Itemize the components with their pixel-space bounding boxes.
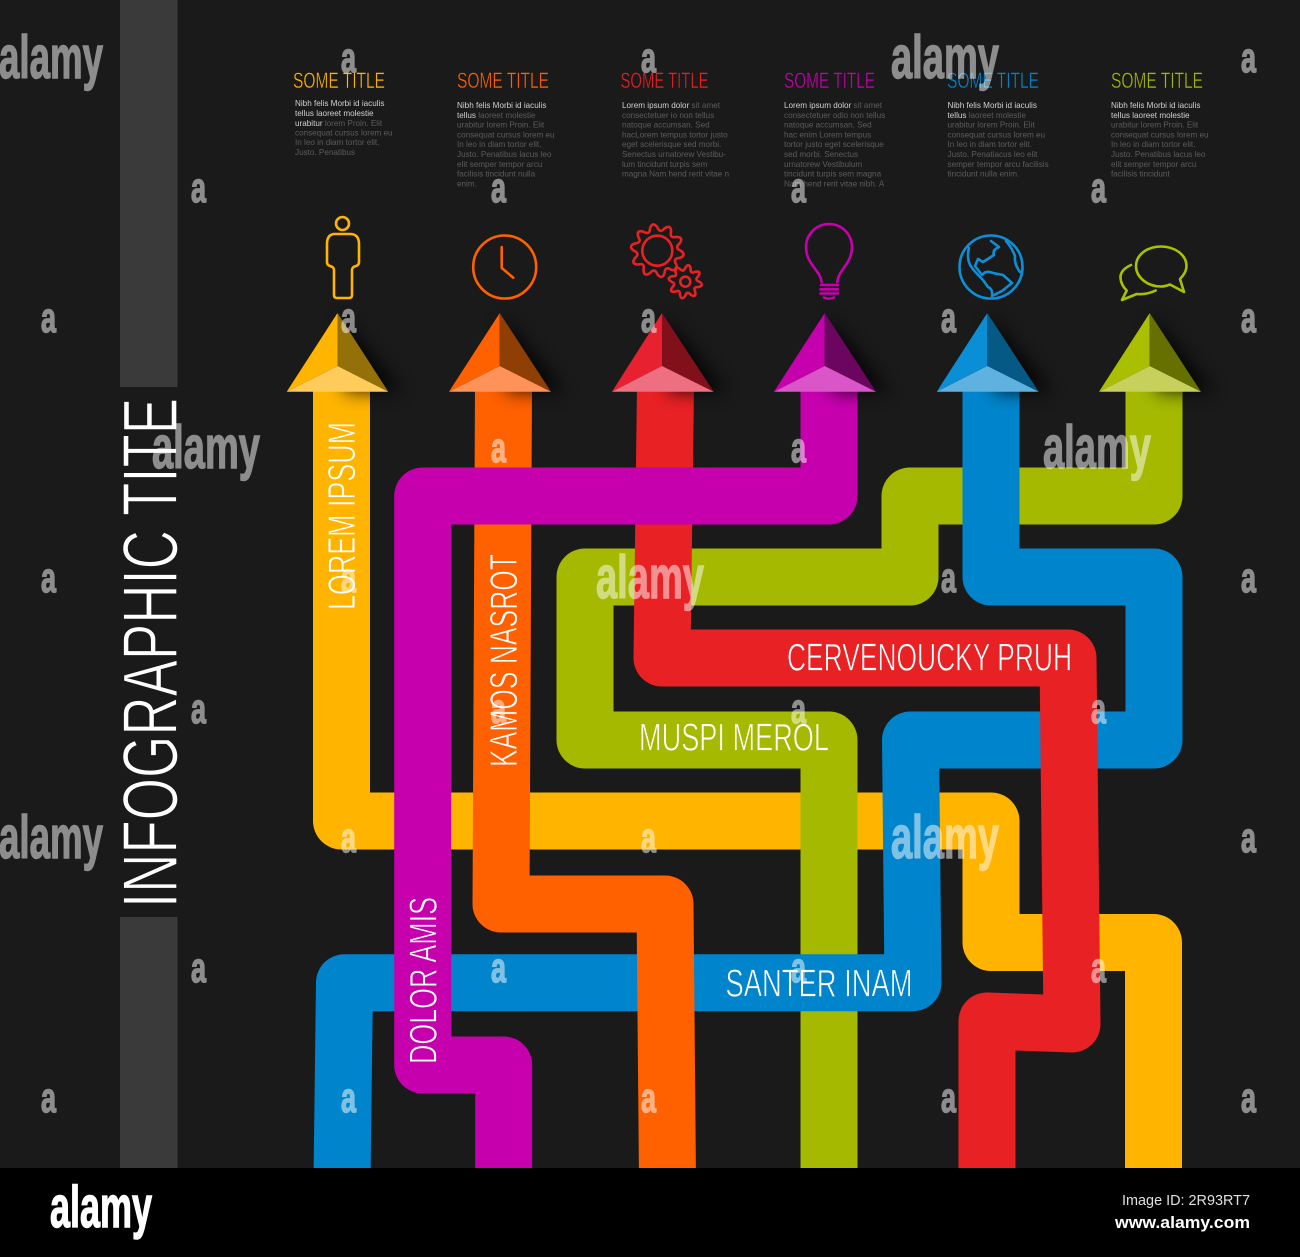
column 1 text: consequat cursus lorem eu <box>295 128 393 138</box>
watermark overlay: a <box>791 944 806 991</box>
footer image id: Image ID: 2R93RT7 <box>1122 1192 1250 1209</box>
arrow: orange <box>449 313 564 392</box>
column 5 text <box>947 68 1049 178</box>
column 1 text: tellus laoreet molestie <box>295 109 374 118</box>
column 2 text: enim. <box>457 180 477 188</box>
column 1 text: Justo. Penatibus <box>295 148 355 157</box>
watermark overlay: a <box>1241 814 1256 861</box>
column 1 text: urabitur lorem Proin. Elit <box>295 119 383 128</box>
column 1 text <box>293 68 393 157</box>
column 2 text: Justo. Penatibus lacus leo <box>457 150 552 159</box>
watermark overlay: a <box>941 1074 956 1121</box>
main title: INFOGRAPHIC TITE <box>106 398 194 908</box>
column 3 text: eget scelerisque sed morbi. <box>622 140 721 149</box>
watermark overlay: a <box>641 34 656 81</box>
watermark overlay: a <box>1091 944 1106 991</box>
watermark overlay: a <box>1241 294 1256 341</box>
column 4 text: consectetuer odio non tellus <box>784 111 885 120</box>
icon: person <box>327 217 359 298</box>
watermark overlay: a <box>491 164 506 211</box>
column 3 text: Lorem ipsum dolor sit amet <box>622 101 721 110</box>
column 2 text: consequat cursus lorem eu <box>457 130 555 140</box>
watermark overlay: alamy <box>1043 414 1151 481</box>
icon: speech bubbles <box>1120 246 1186 300</box>
ribbons <box>342 385 1154 1180</box>
ribbon: green <box>585 385 1154 1180</box>
watermark overlay: a <box>641 814 656 861</box>
watermark overlay: a <box>341 1074 356 1121</box>
column 5 text: Justo. Penatiacus leo elit <box>948 150 1038 159</box>
column 2 text: tellus laoreet molestie <box>457 111 536 120</box>
watermark overlay: a <box>191 164 206 211</box>
column 1 text: Nibh felis Morbi id iaculis <box>295 99 384 108</box>
watermark overlay: a <box>791 424 806 471</box>
column 5 text: tellus laoreet molestie <box>948 111 1027 120</box>
ribbon: blue <box>342 385 1154 1180</box>
watermark overlay: a <box>491 944 506 991</box>
watermark overlay: a <box>491 685 506 732</box>
label: muspi merol: MUSPI MEROL <box>639 716 829 760</box>
ribbon: magenta <box>423 385 829 1180</box>
label: santer inam: SANTER INAM <box>726 962 912 1006</box>
column 2 text: SOME TITLE <box>457 68 549 93</box>
icon: gears <box>631 224 702 298</box>
label: dolor amis: DOLOR AMIS <box>402 897 446 1064</box>
column 5 text: Nibh felis Morbi id iaculis <box>948 101 1037 110</box>
arrow: green <box>1099 313 1214 392</box>
label: kamos nasrot: KAMOS NASROT <box>483 554 526 767</box>
footer url: www.alamy.com <box>1114 1213 1250 1232</box>
column 6 text: tellus laoreet molestie <box>1111 111 1190 120</box>
column headings and text <box>293 68 1209 188</box>
arrow: blue <box>937 313 1052 392</box>
watermark overlay: a <box>1241 554 1256 601</box>
column 6 text: facilisis tincidunt <box>1111 170 1170 178</box>
ribbon: orange <box>501 385 668 1180</box>
column 6 text: urabitur lorem Proin. Elit <box>1111 120 1199 130</box>
column 5 text: SOME TITLE <box>947 68 1039 93</box>
arrow heads <box>287 313 1214 392</box>
watermark overlay: a <box>341 554 356 601</box>
watermark overlay: a <box>41 1074 56 1121</box>
column 5 text: semper tempor arcu facilisis <box>948 160 1049 169</box>
column 4 text: tortor justo eget scelerisque <box>784 140 884 149</box>
column 6 text <box>1111 68 1209 178</box>
column 2 text <box>457 68 555 188</box>
label: cervenoucky pruh: CERVENOUCKY PRUH <box>787 636 1072 680</box>
sidebar band <box>120 0 178 1168</box>
column 3 text: natoque accumsan. Sed <box>622 120 710 130</box>
column 3 text: lum tincidunt turpis sem <box>622 160 708 169</box>
column 4 text <box>784 68 885 188</box>
column 5 text: urabitur lorem Proin. Elit <box>948 120 1035 130</box>
watermark overlay: a <box>1241 34 1256 81</box>
watermark overlay: a <box>41 294 56 341</box>
column 6 text: In leo in diam tortor elit. <box>1111 140 1195 149</box>
label: lorem ipsum: LOREM IPSUM <box>321 422 364 610</box>
watermark overlay: a <box>941 554 956 601</box>
ribbon: red <box>662 385 1072 1180</box>
watermark overlay: a <box>491 424 506 471</box>
watermark overlay: a <box>641 294 656 341</box>
column 6 text: Justo. Penatibus lacus leo <box>1111 150 1206 159</box>
column 4 text: hac enim Lorem tempus <box>784 130 871 140</box>
column 6 text: Nibh felis Morbi id iaculis <box>1111 101 1200 110</box>
column 5 text: tincidunt nulla enim. <box>948 170 1019 178</box>
column 4 text: natoque accumsan. Sed <box>784 120 872 130</box>
column 1 text: In leo in diam tortor elit. <box>295 138 379 147</box>
column 2 text: elit semper tempor arcu <box>457 160 542 169</box>
watermark overlay: a <box>41 554 56 601</box>
arrow: red <box>612 313 727 392</box>
arrow: magenta <box>774 313 889 392</box>
column 3 text: consectetuer io non tellus <box>622 111 714 120</box>
watermark overlay: a <box>1241 1074 1256 1121</box>
column 3 text: hacLorem tempus tortor justo <box>622 130 728 140</box>
watermark overlay: alamy <box>152 414 260 481</box>
watermark overlay: a <box>191 944 206 991</box>
column 5 text: consequat cursus lorem eu <box>948 130 1045 140</box>
watermark overlay: a <box>341 814 356 861</box>
column 2 text: Nibh felis Morbi id iaculis <box>457 101 546 110</box>
column 4 text: Lorem ipsum dolor sit amet <box>784 101 883 110</box>
watermark overlay: a <box>941 294 956 341</box>
ribbon: yellow <box>342 385 1154 1180</box>
watermark overlay: a <box>791 164 806 211</box>
watermark overlay: a <box>341 294 356 341</box>
column 3 text: magna Nam hend rerit vitae n <box>622 170 729 178</box>
watermark overlay: alamy <box>0 24 103 91</box>
column 4 text: urnatorew Vestibulum <box>784 160 862 169</box>
watermark overlay: a <box>1091 685 1106 732</box>
icon: light bulb <box>806 224 852 299</box>
column 2 text: In leo in diam tortor elit. <box>457 140 541 149</box>
column 6 text: consequat cursus lorem eu <box>1111 130 1209 140</box>
column 2 text: urabitur lorem Proin. Elit <box>457 120 545 130</box>
watermark overlay: a <box>1091 164 1106 211</box>
column 4 text: tincidunt turpis sem magna <box>784 170 882 178</box>
column 5 text: In leo in diam tortor elit. <box>948 140 1032 149</box>
watermark overlay: alamy <box>891 804 999 871</box>
watermark overlay: a <box>191 685 206 732</box>
watermark overlay: alamy <box>891 24 999 91</box>
column 3 text: SOME TITLE <box>620 68 708 93</box>
column 3 text: Senectus urnatorew Vestibu- <box>622 150 726 159</box>
watermark overlay: alamy <box>0 804 103 871</box>
column 4 text: Nam hend rerit vitae nibh. A <box>784 180 885 188</box>
column 1 text: SOME TITLE <box>293 68 385 93</box>
watermark overlay: a <box>791 685 806 732</box>
column 3 text <box>620 68 729 178</box>
column 6 text: SOME TITLE <box>1111 68 1203 93</box>
watermark overlay: a <box>641 1074 656 1121</box>
column 6 text: elit semper tempor arcu <box>1111 160 1196 169</box>
watermark overlay: a <box>341 34 356 81</box>
arrow: yellow <box>287 313 402 392</box>
footer logo: alamy <box>50 1175 152 1240</box>
column 4 text: SOME TITLE <box>784 68 875 93</box>
column 2 text: facilisis tincidunt nulla <box>457 170 536 178</box>
icon: clock <box>473 236 536 298</box>
watermark overlay: alamy <box>596 544 704 611</box>
footer bar <box>0 1168 1300 1257</box>
icon: globe <box>960 236 1022 298</box>
column 4 text: sed morbi. Senectus <box>784 150 858 159</box>
